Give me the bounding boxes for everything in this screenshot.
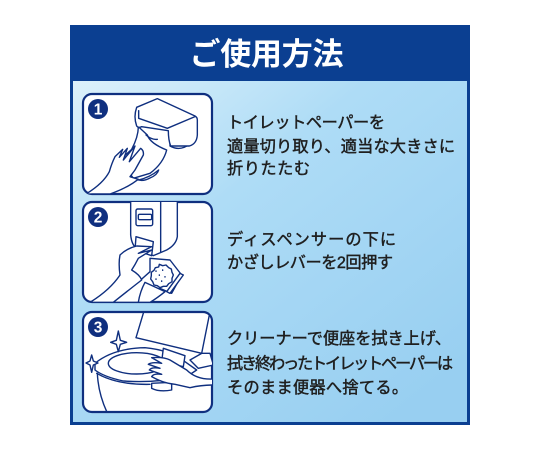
step number 2: 2 — [94, 210, 102, 226]
step number 1: 1 — [94, 102, 103, 118]
panel: step 3 illustration — [83, 311, 213, 415]
title: ご使用方法 — [190, 37, 344, 72]
icon: paper dispenser and hand — [86, 99, 197, 194]
panel: step 1 illustration — [83, 94, 212, 194]
text: step 2: ディスペンサーの下に — [227, 230, 396, 249]
text: step 3: クリーナーで便座を拭き上げ、 — [227, 330, 451, 348]
title banner — [70, 25, 470, 81]
panel: step 2 illustration — [83, 198, 212, 302]
text: step 3: そのまま便器へ捨てる。 — [227, 379, 408, 397]
step number 3: 3 — [94, 320, 103, 336]
text: step 2 — [227, 230, 396, 272]
text: step 2: かざしレバーを2回押す — [227, 253, 393, 272]
instruction board — [70, 25, 470, 424]
icon: dispenser and hands with tissue — [90, 198, 183, 302]
icon: toilet seat and hand with sparkles — [86, 311, 213, 415]
text: step 1 — [227, 114, 455, 178]
text: step 1: 適量切り取り、適当な大きさに — [227, 138, 455, 156]
text: step 1: 折りたたむ — [227, 160, 310, 178]
text: step 1: トイレットペーパーを — [227, 114, 385, 132]
text: step 3: 拭き終わったトイレットペーパーは — [227, 355, 453, 373]
text: step 3 — [227, 330, 453, 397]
